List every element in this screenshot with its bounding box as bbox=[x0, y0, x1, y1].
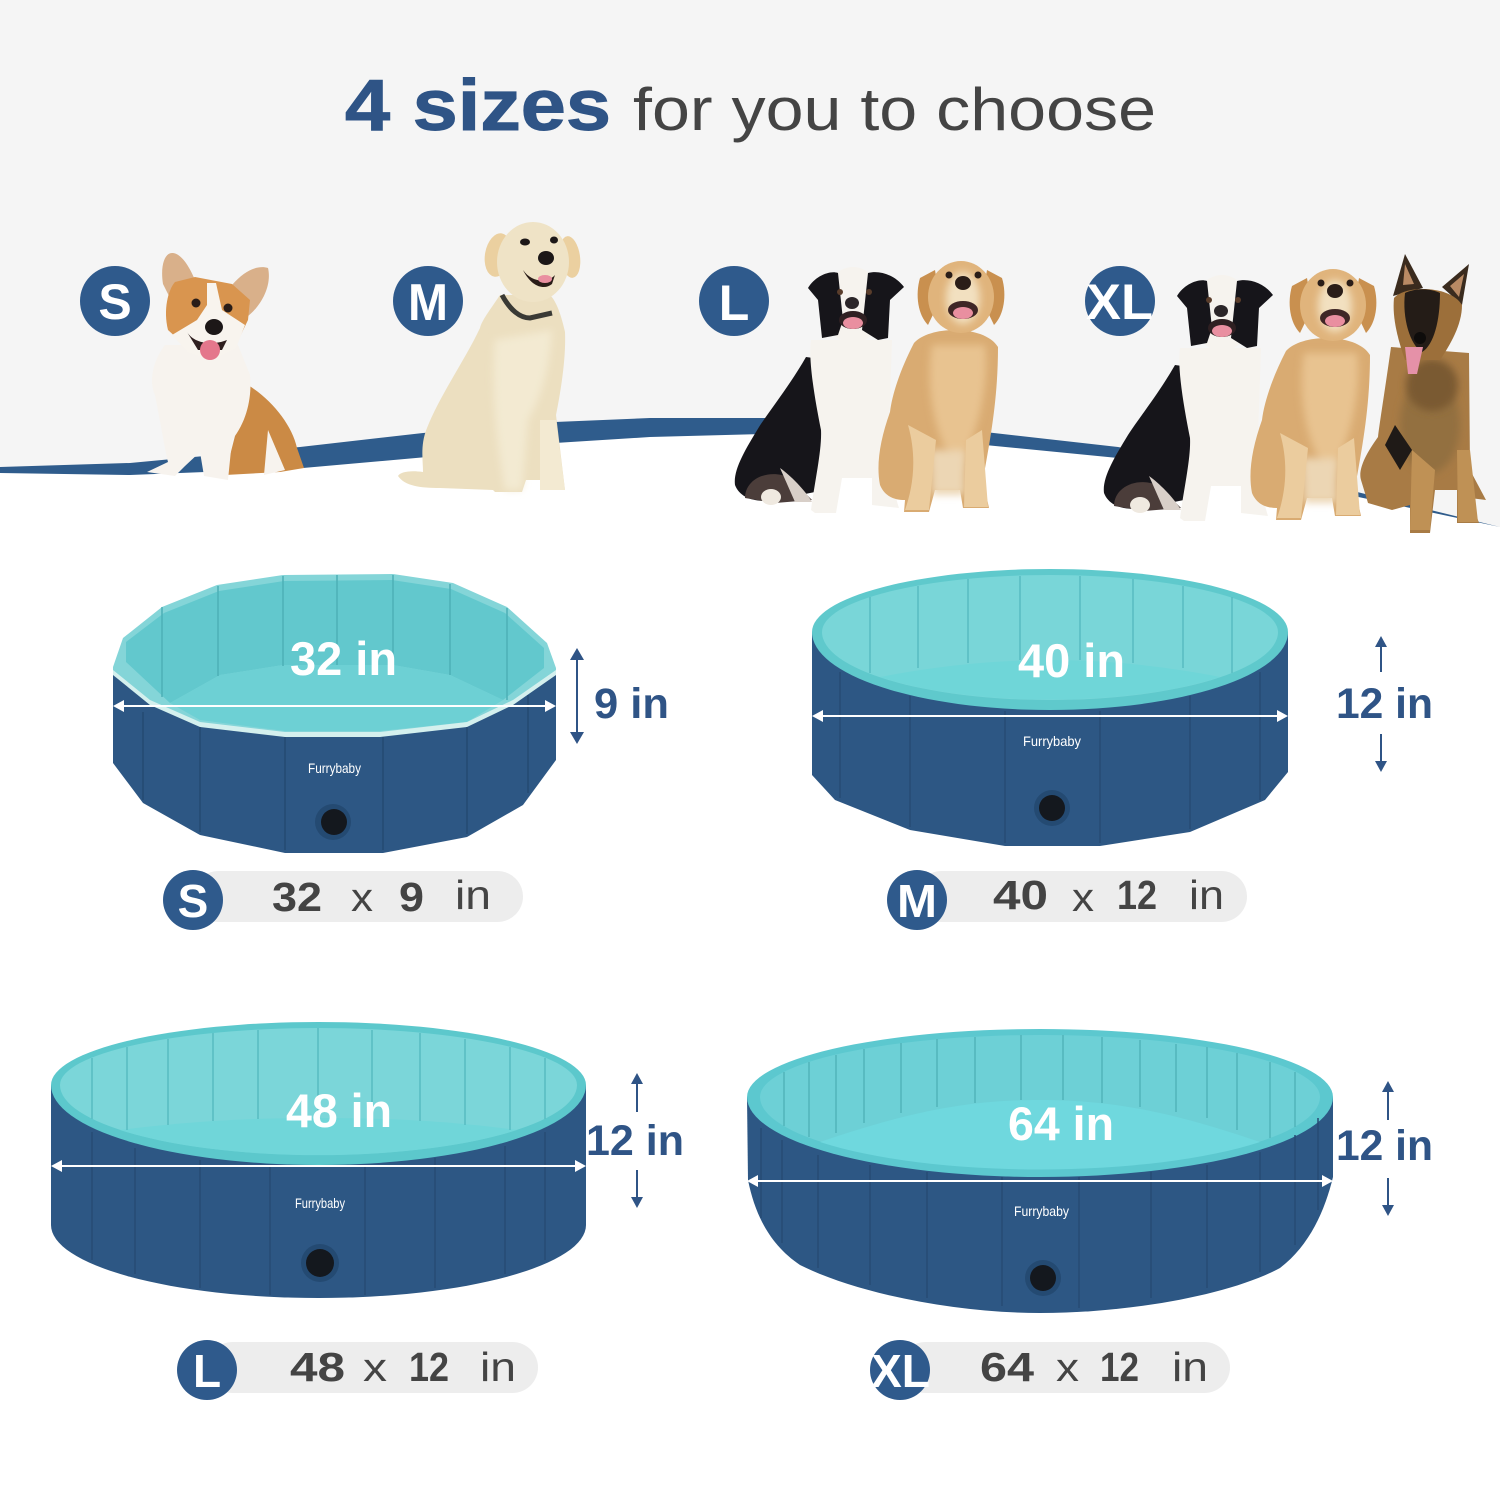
background: grey top area bbox=[0, 0, 1500, 527]
size pill XL: 64 bbox=[980, 1344, 1034, 1390]
dog: golden retriever in group XL bbox=[1250, 269, 1376, 520]
size pill XL bbox=[870, 1340, 1230, 1400]
pool logo: Furrybaby bbox=[1023, 733, 1081, 749]
dog: german shepherd bbox=[1360, 254, 1486, 533]
inner wall bbox=[760, 1035, 1320, 1169]
size pill M: 40 bbox=[993, 872, 1048, 918]
dog: corgi bbox=[147, 253, 304, 480]
diameter label: 48 in bbox=[286, 1084, 392, 1137]
outer wall bbox=[747, 1097, 1333, 1313]
drain valve bbox=[1025, 1260, 1061, 1296]
size pill L: 48 bbox=[290, 1344, 345, 1390]
title bbox=[345, 66, 1156, 146]
height label M bbox=[1336, 636, 1433, 772]
title: 4 sizes bbox=[345, 66, 611, 146]
size pill S bbox=[163, 870, 523, 930]
size pill S: 32 bbox=[272, 874, 322, 920]
dog: border collie in group XL bbox=[1104, 275, 1273, 521]
size pill S: in bbox=[455, 872, 491, 918]
pool rim bbox=[113, 574, 556, 735]
panel: pool XL bbox=[747, 1029, 1333, 1313]
pool logo: Furrybaby bbox=[295, 1195, 345, 1211]
size pill L bbox=[177, 1340, 538, 1400]
size pill L: x bbox=[363, 1346, 387, 1390]
drain valve bbox=[315, 804, 351, 840]
height label M: 12 in bbox=[1336, 680, 1433, 728]
size pill M: in bbox=[1189, 872, 1224, 918]
size badge L bbox=[699, 266, 769, 336]
height label XL bbox=[1336, 1081, 1433, 1216]
diameter arrow bbox=[812, 710, 1288, 722]
dog: golden retriever in group L bbox=[878, 261, 1004, 512]
pool floor bbox=[820, 1100, 1260, 1169]
size pill M: 12 bbox=[1117, 872, 1157, 918]
panel: pool M bbox=[812, 569, 1288, 846]
height label S bbox=[570, 648, 669, 744]
size badge XL: XL bbox=[1086, 274, 1153, 330]
size pill L: in bbox=[480, 1344, 516, 1390]
wave divider bbox=[0, 418, 1500, 527]
size pill XL: 12 bbox=[1100, 1344, 1139, 1390]
height label XL: 12 in bbox=[1336, 1122, 1433, 1170]
size pill XL: XL bbox=[871, 1345, 930, 1397]
pool rim bbox=[51, 1022, 586, 1165]
outer wall bbox=[812, 632, 1288, 846]
diameter arrow bbox=[51, 1160, 586, 1172]
pool logo: Furrybaby bbox=[308, 760, 361, 776]
size pill L: L bbox=[193, 1345, 221, 1397]
pool floor bbox=[880, 660, 1220, 700]
drain valve bbox=[301, 1244, 339, 1282]
outer wall bbox=[51, 1085, 586, 1298]
diameter arrow bbox=[113, 700, 556, 712]
dog: cream golden retriever bbox=[398, 222, 583, 492]
diameter label: 40 in bbox=[1018, 634, 1125, 687]
inner wall bbox=[126, 580, 544, 703]
panel: pool S bbox=[113, 574, 556, 853]
height label S: 9 in bbox=[594, 680, 669, 728]
diameter label: 32 in bbox=[290, 632, 397, 685]
pool floor bbox=[120, 1118, 517, 1155]
size badge M: M bbox=[408, 274, 448, 332]
diameter label: 64 in bbox=[1008, 1097, 1114, 1150]
size pill S: 9 bbox=[399, 874, 424, 920]
pool rim bbox=[812, 569, 1288, 710]
pool logo: Furrybaby bbox=[1014, 1203, 1069, 1219]
panel: pool L bbox=[51, 1022, 586, 1298]
height label L: 12 in bbox=[586, 1117, 684, 1165]
size pill XL: in bbox=[1172, 1344, 1208, 1390]
inner wall bbox=[822, 575, 1278, 700]
size pill XL: x bbox=[1056, 1346, 1079, 1390]
dog: border collie in group L bbox=[735, 267, 904, 513]
outer wall bbox=[113, 675, 556, 853]
size badge S: S bbox=[98, 274, 132, 330]
height label L bbox=[586, 1073, 684, 1208]
size badge S bbox=[80, 266, 150, 336]
pool rim bbox=[747, 1029, 1333, 1177]
size pill S: S bbox=[178, 875, 208, 927]
diameter arrow bbox=[747, 1175, 1333, 1187]
size pill M: x bbox=[1072, 876, 1094, 920]
size pill S: x bbox=[351, 876, 373, 920]
size badge L: L bbox=[719, 275, 749, 331]
inner wall bbox=[60, 1028, 577, 1155]
drain valve bbox=[1034, 790, 1070, 826]
size badge M bbox=[393, 266, 463, 336]
pool floor bbox=[170, 665, 503, 731]
size pill M bbox=[887, 870, 1247, 930]
size pill M: M bbox=[897, 875, 937, 927]
title: for you to choose bbox=[633, 76, 1156, 143]
size pill L: 12 bbox=[409, 1344, 449, 1390]
